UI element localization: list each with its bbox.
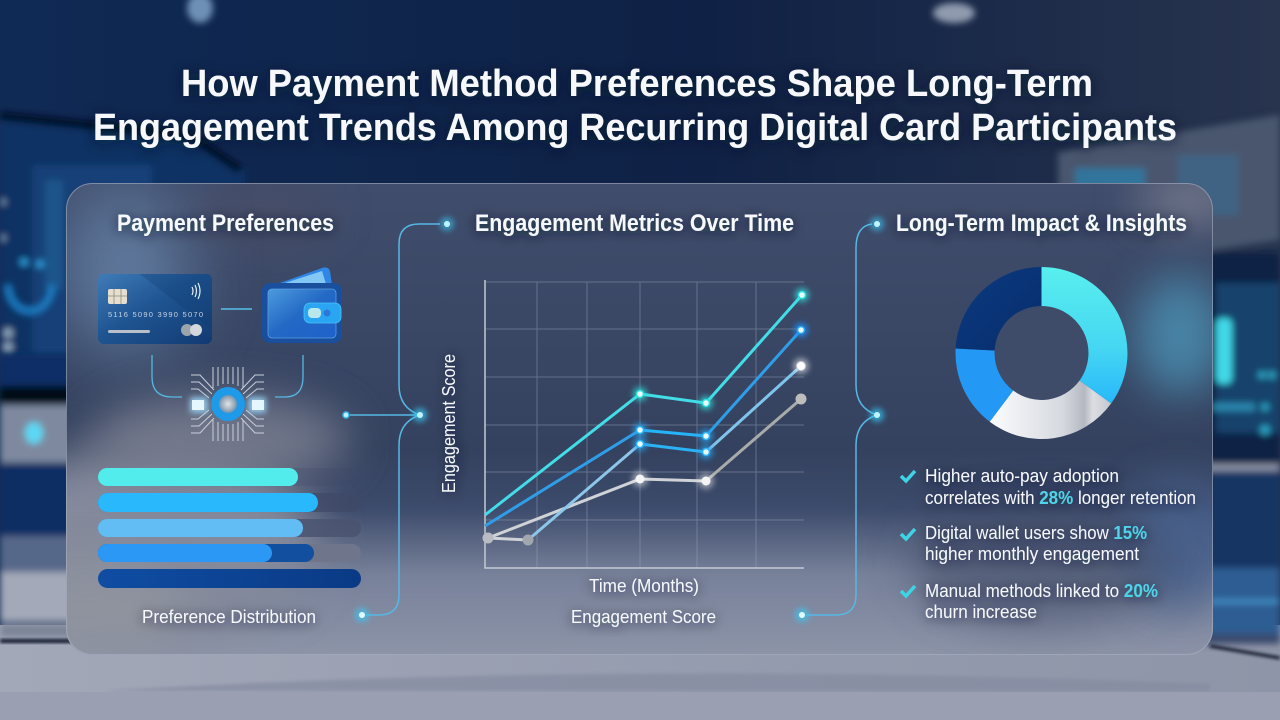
label: preference distribution: Preference Distribution: [142, 607, 316, 627]
bar chart: preference distribution: [98, 468, 361, 588]
series: cyan: [485, 288, 809, 515]
series: blue: [485, 323, 808, 526]
heading: engagement metrics: Engagement Metrics Over Time: [475, 210, 794, 237]
insight 2: Digital wallet users show 15%: [925, 522, 1147, 543]
title: Engagement Trends Among Recurring Digital Card Participants: [93, 107, 1177, 149]
insight 1: Higher auto-pay adoption: [925, 465, 1119, 486]
wallet to chip link: [275, 355, 303, 397]
right laptop blurred: [1058, 115, 1280, 644]
insight 2: [901, 522, 1147, 564]
connector brackets: [350, 224, 877, 615]
insight 1: [901, 465, 1196, 508]
icon: processor chip: [190, 367, 266, 441]
segment: white: [990, 381, 1111, 439]
bar 1: [98, 468, 298, 486]
card to chip link: [152, 355, 182, 397]
y axis label: Engagement Score: [439, 354, 459, 493]
icon: credit card: 5116 5090 3990 5070: [108, 310, 203, 319]
icon: wallet: [262, 267, 342, 343]
chart caption: Engagement Score: [571, 607, 716, 627]
heading: long-term impact: Long-Term Impact & Insights: [896, 210, 1187, 237]
series: gray: [488, 394, 806, 538]
donut chart: [955, 267, 1127, 439]
ceiling lights: [187, 0, 213, 23]
title: [93, 63, 1177, 149]
desk surface: [0, 625, 1280, 720]
segment: blue: [955, 348, 1013, 422]
left laptop blurred: [0, 355, 80, 637]
insight 1: correlates with 28% longer retention: [925, 487, 1196, 508]
series: light blue: [482, 358, 809, 546]
icon: credit card: [98, 274, 212, 344]
line chart: engagement metrics: [482, 280, 809, 568]
glass panel: [66, 183, 1213, 655]
insight 3: [901, 580, 1158, 622]
insight 3: Manual methods linked to 20%: [925, 580, 1158, 601]
axes: [485, 280, 804, 568]
x axis label: Time (Months): [589, 576, 699, 596]
heading: payment preferences: Payment Preferences: [117, 210, 334, 237]
card to wallet link: [221, 308, 252, 310]
segment: cyan: [1042, 267, 1127, 404]
left monitor blurred: [0, 116, 245, 360]
connector nodes: [343, 217, 884, 622]
insight 3: churn increase: [925, 601, 1037, 622]
bar 3: [98, 519, 303, 537]
insight 2: higher monthly engagement: [925, 543, 1139, 564]
bar 4: [98, 544, 314, 562]
bar 2: [98, 493, 318, 512]
title: How Payment Method Preferences Shape Long-Term: [181, 63, 1093, 105]
segment: navy: [956, 267, 1042, 350]
bar 5: [98, 569, 361, 588]
